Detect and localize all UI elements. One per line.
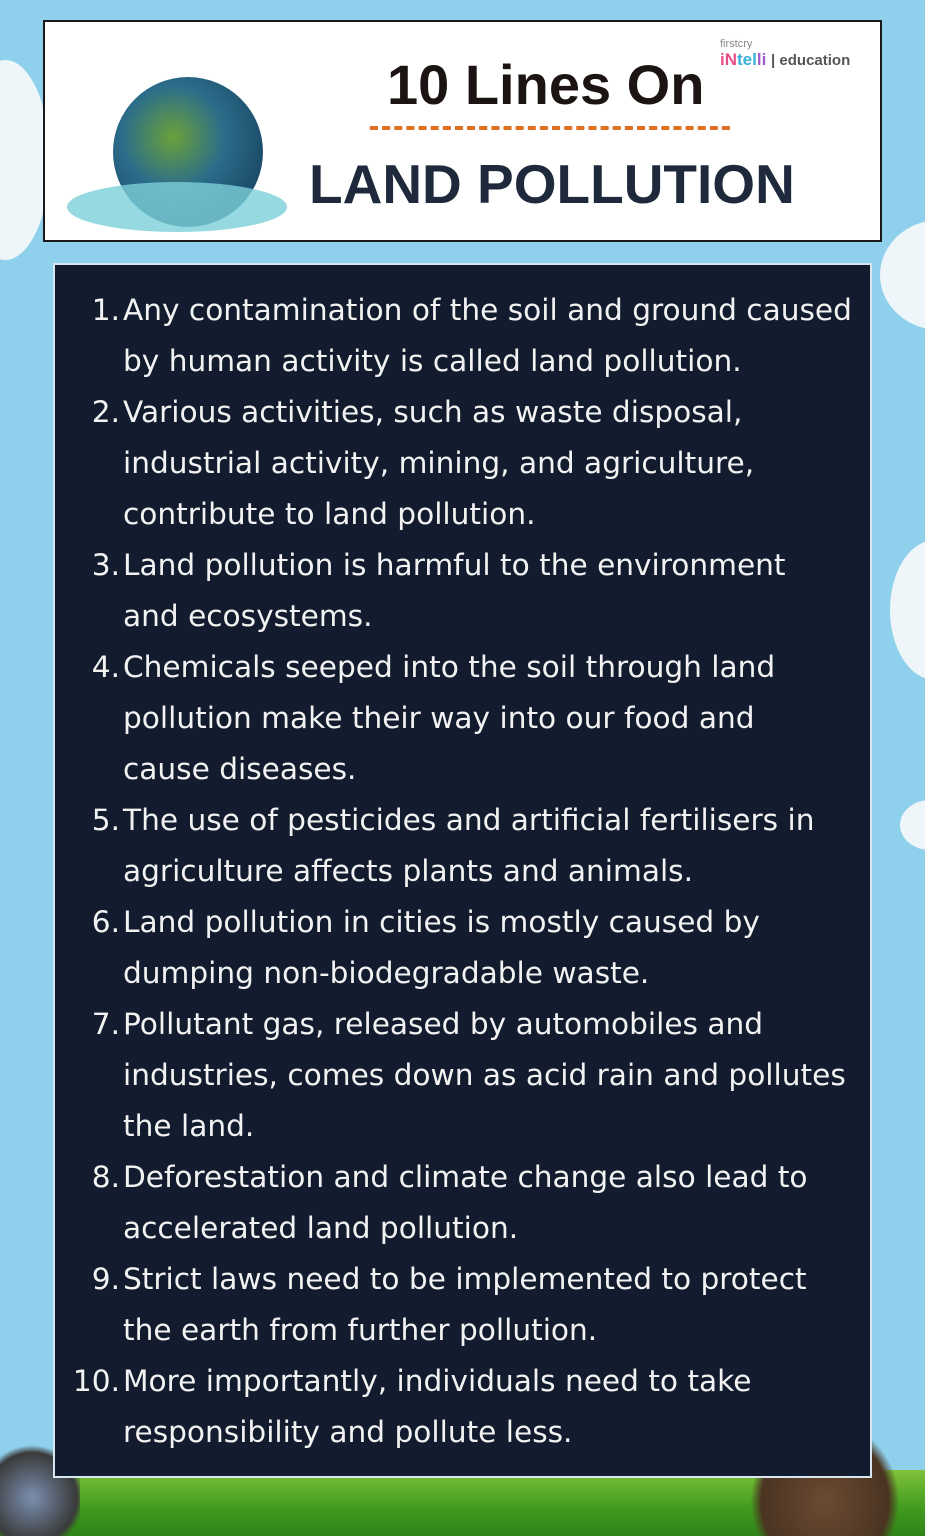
dashed divider	[370, 126, 730, 130]
panel: list of 10 lines: 1.	[92, 293, 120, 327]
panel: list of 10 lines: 8.	[92, 1160, 120, 1194]
panel: list of 10 lines: Deforestation and climate change also lead to	[123, 1160, 808, 1194]
logo: firstcry	[720, 38, 752, 50]
panel: list of 10 lines: Pollutant gas, released by automobiles and	[123, 1007, 763, 1041]
title line 1: 10 Lines On	[387, 53, 704, 116]
item 7	[92, 1007, 846, 1143]
title line 2: LAND POLLUTION	[309, 153, 795, 215]
panel: list of 10 lines: 4.	[92, 650, 120, 684]
grass	[0, 1470, 925, 1536]
panel: list of 10 lines: responsibility and pollute less.	[123, 1415, 572, 1449]
panel: list of 10 lines	[53, 263, 872, 1478]
logo	[720, 38, 850, 69]
panel: list of 10 lines: industrial activity, mining, and agriculture,	[123, 446, 754, 480]
panel: list of 10 lines: industries, comes down as acid rain and pollutes	[123, 1058, 846, 1092]
panel: list of 10 lines: the land.	[123, 1109, 254, 1143]
panel: list of 10 lines: dumping non-biodegradable waste.	[123, 956, 649, 990]
icon: garbage pile left	[0, 1440, 80, 1536]
panel: list of 10 lines: Chemicals seeped into the soil through land	[123, 650, 775, 684]
header panel	[43, 20, 882, 242]
panel: list of 10 lines: pollution make their way into our food and	[123, 701, 754, 735]
panel: list of 10 lines: The use of pesticides and artificial fertilisers in	[123, 803, 814, 837]
panel: list of 10 lines: 9.	[92, 1262, 120, 1296]
item 5	[92, 803, 814, 888]
panel: list of 10 lines: 7.	[92, 1007, 120, 1041]
panel: list of 10 lines: 2.	[92, 395, 120, 429]
panel: list of 10 lines: Land pollution is harmful to the environment	[123, 548, 786, 582]
item 4	[92, 650, 775, 786]
icon: polluted earth	[113, 77, 263, 227]
panel: list of 10 lines: 5.	[92, 803, 120, 837]
item 6	[92, 905, 760, 990]
panel: list of 10 lines: 3.	[92, 548, 120, 582]
item 1	[92, 293, 852, 378]
panel: list of 10 lines: More importantly, individuals need to take	[123, 1364, 751, 1398]
panel: list of 10 lines: cause diseases.	[123, 752, 356, 786]
panel: list of 10 lines: accelerated land pollution.	[123, 1211, 518, 1245]
panel: list of 10 lines: Strict laws need to be implemented to protect	[123, 1262, 807, 1296]
icon: garbage pile right	[750, 1420, 900, 1536]
item 9	[92, 1262, 807, 1347]
logo: iNtelli | education	[720, 50, 850, 69]
panel: list of 10 lines: Various activities, such as waste disposal,	[123, 395, 742, 429]
panel: list of 10 lines: and ecosystems.	[123, 599, 372, 633]
item 2	[92, 395, 754, 531]
panel: list of 10 lines: 6.	[92, 905, 120, 939]
panel: list of 10 lines: contribute to land pollution.	[123, 497, 536, 531]
panel: list of 10 lines: Any contamination of the soil and ground caused	[123, 293, 852, 327]
panel: list of 10 lines: agriculture affects plants and animals.	[123, 854, 693, 888]
item 8	[92, 1160, 808, 1245]
panel: list of 10 lines: by human activity is called land pollution.	[123, 344, 742, 378]
item 3	[92, 548, 786, 633]
panel: list of 10 lines: 10.	[73, 1364, 120, 1398]
item 10	[73, 1364, 751, 1449]
panel: list of 10 lines: Land pollution in cities is mostly caused by	[123, 905, 760, 939]
panel: list of 10 lines: the earth from further pollution.	[123, 1313, 597, 1347]
